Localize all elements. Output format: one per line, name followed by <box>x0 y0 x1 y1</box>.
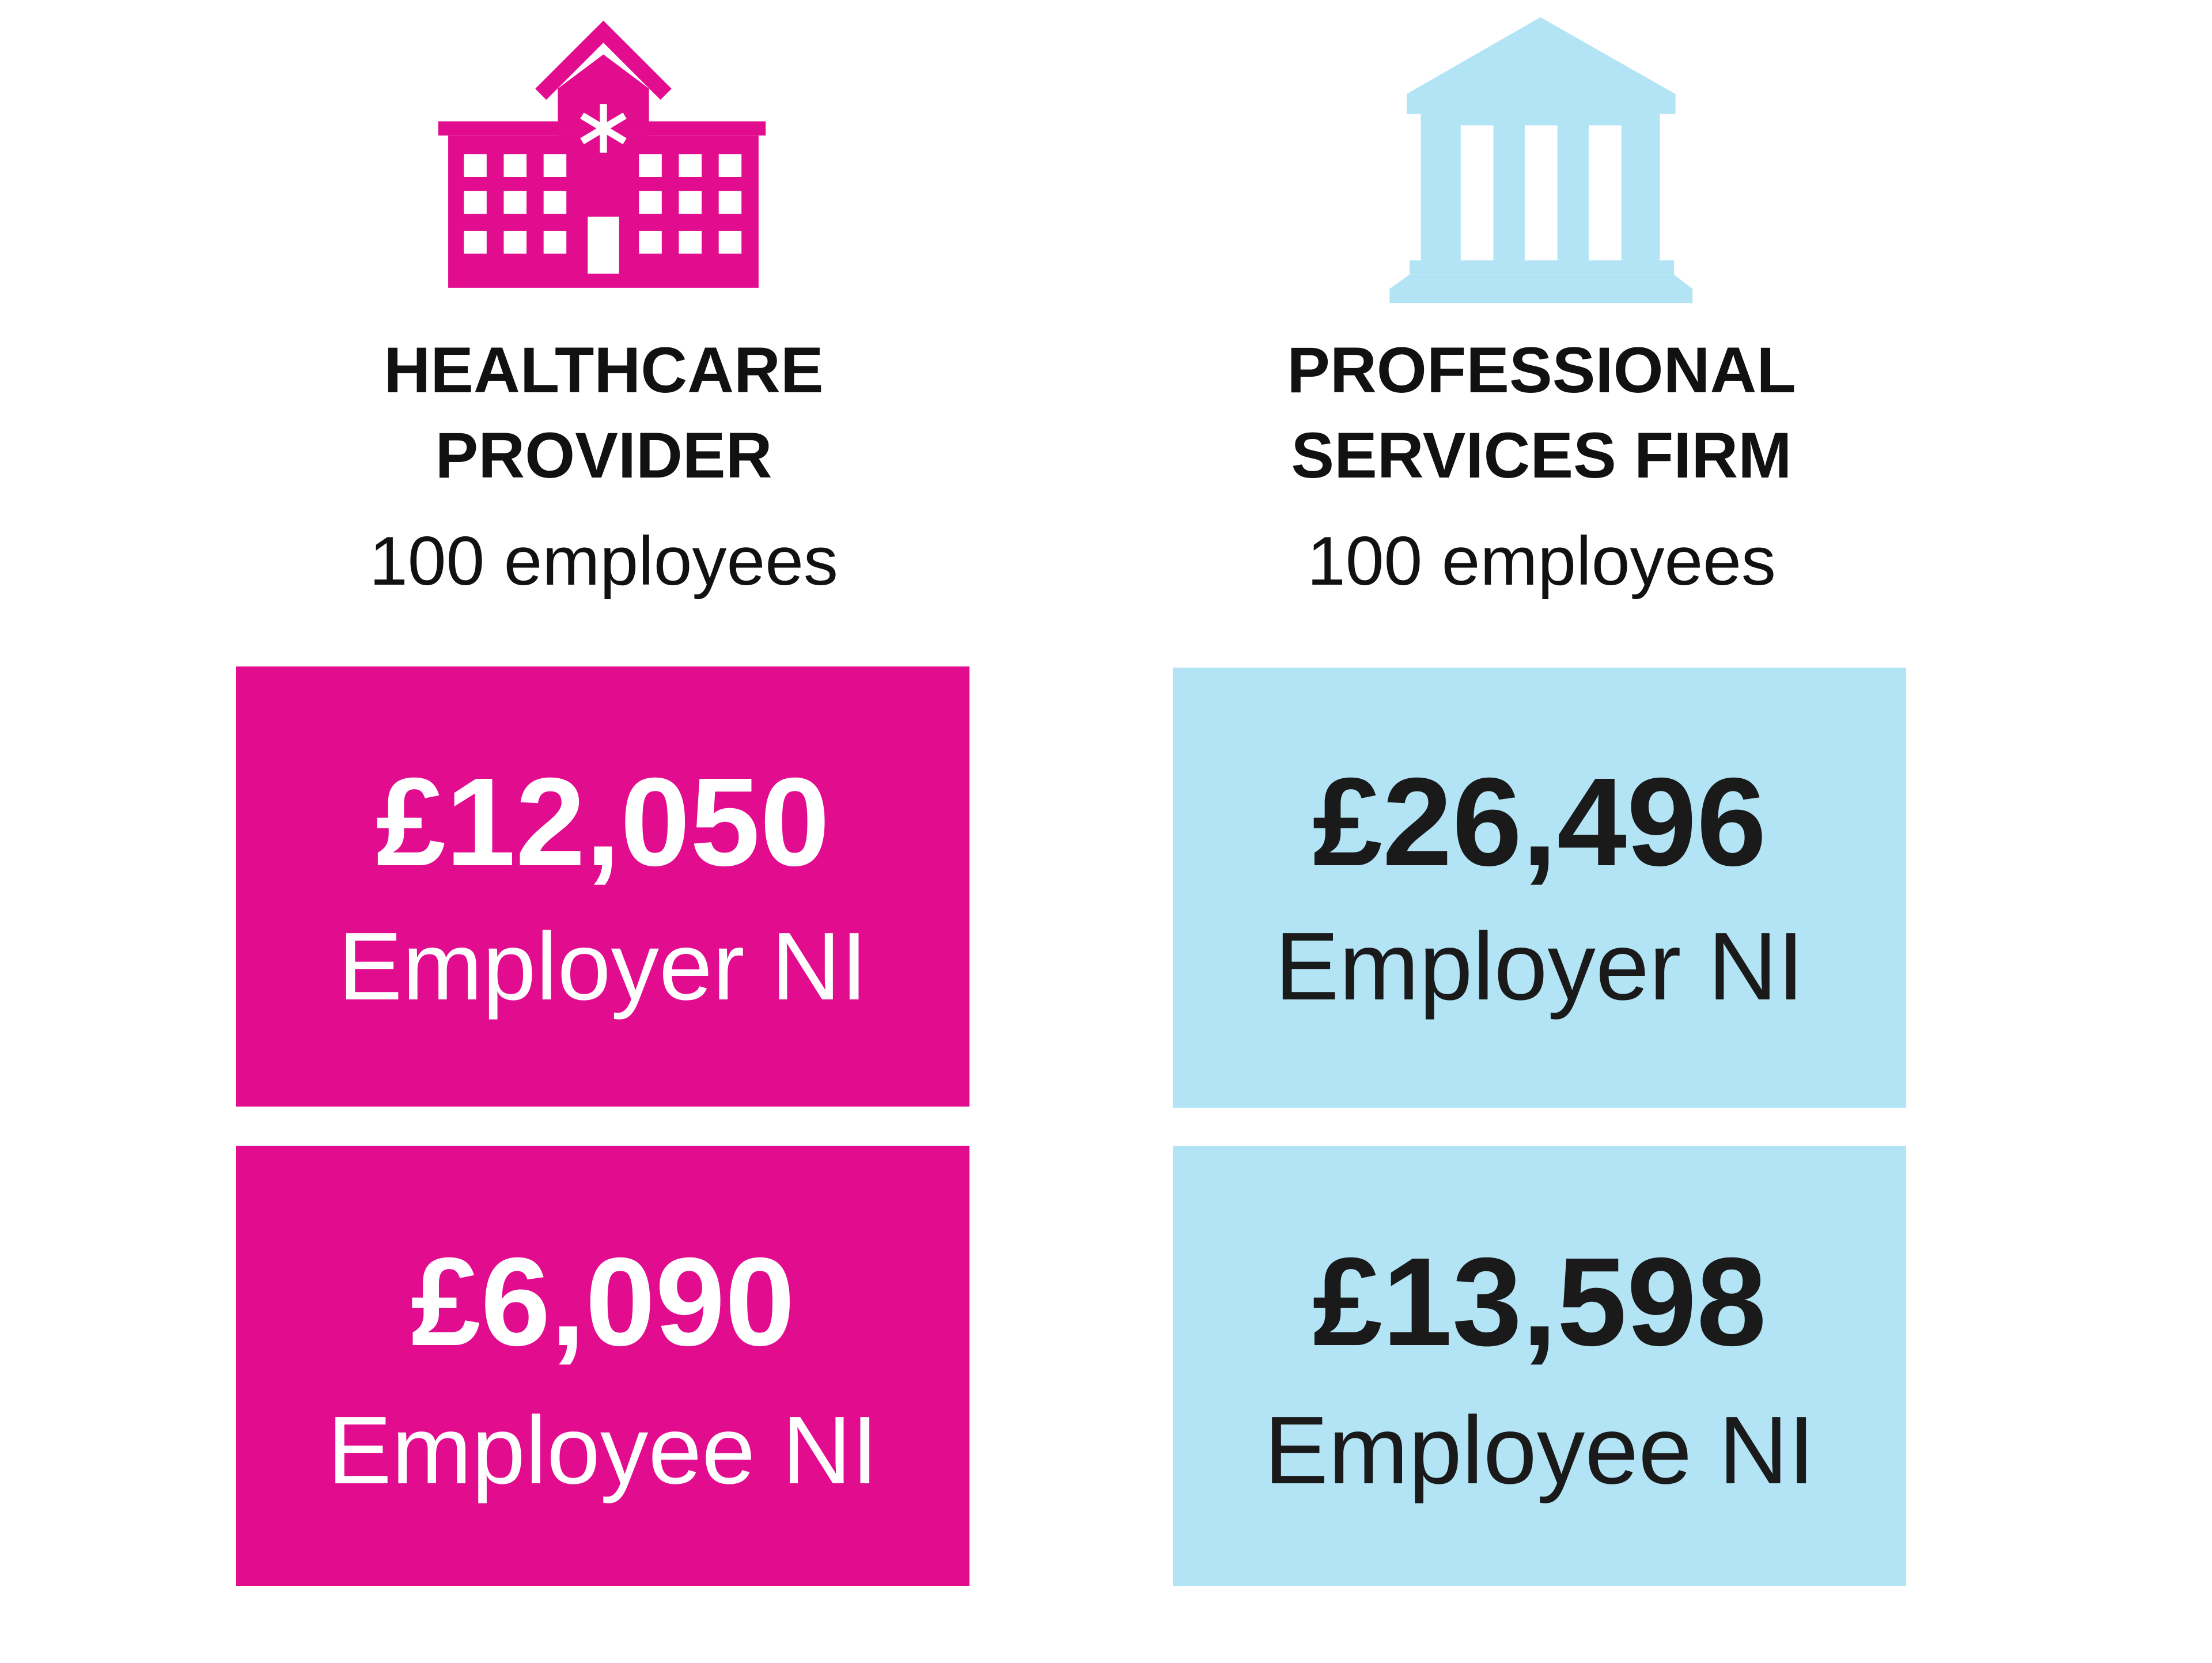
subheading: healthcare employees: 100 employees <box>369 522 838 600</box>
label: Employer NI <box>1275 913 1804 1020</box>
heading: healthcare provider: HEALTHCARE <box>384 334 824 406</box>
label: Employer NI <box>338 913 868 1020</box>
panel: professional employer NI <box>1173 668 1906 1108</box>
heading: professional services firm: PROFESSIONAL <box>1287 334 1796 406</box>
icon: hospital <box>438 21 766 288</box>
heading: professional services firm <box>1287 334 1796 491</box>
value: £26,496 <box>1312 752 1766 892</box>
icon: institution building <box>1389 17 1692 303</box>
value: £12,050 <box>376 752 830 892</box>
value: £13,598 <box>1312 1232 1766 1372</box>
value: £6,090 <box>411 1232 795 1372</box>
heading: healthcare provider: PROVIDER <box>435 419 772 491</box>
label: Employee NI <box>1264 1397 1815 1504</box>
panel: healthcare employee NI <box>236 1146 969 1586</box>
panel: healthcare employer NI <box>236 666 969 1107</box>
label: Employee NI <box>327 1397 878 1504</box>
heading: professional services firm: SERVICES FIRM <box>1291 419 1792 491</box>
subheading: professional employees: 100 employees <box>1307 522 1776 600</box>
heading: healthcare provider <box>384 334 824 491</box>
panel: professional employee NI <box>1173 1146 1906 1586</box>
